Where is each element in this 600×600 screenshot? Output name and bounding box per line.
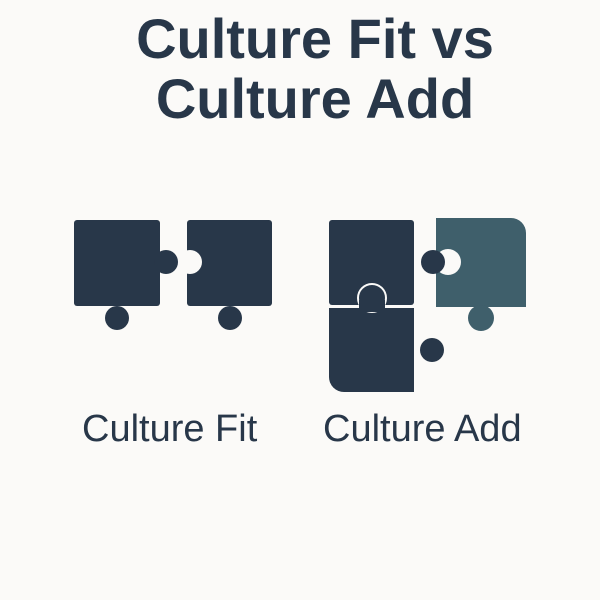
title: Culture Add bbox=[156, 67, 474, 130]
label: culture fit: Culture Fit bbox=[82, 408, 257, 450]
label: culture add: Culture Add bbox=[323, 408, 522, 450]
icon: culture add pieces bbox=[329, 218, 526, 392]
title bbox=[136, 7, 494, 130]
icon: culture fit pieces bbox=[74, 220, 272, 330]
title: Culture Fit vs bbox=[136, 7, 494, 70]
